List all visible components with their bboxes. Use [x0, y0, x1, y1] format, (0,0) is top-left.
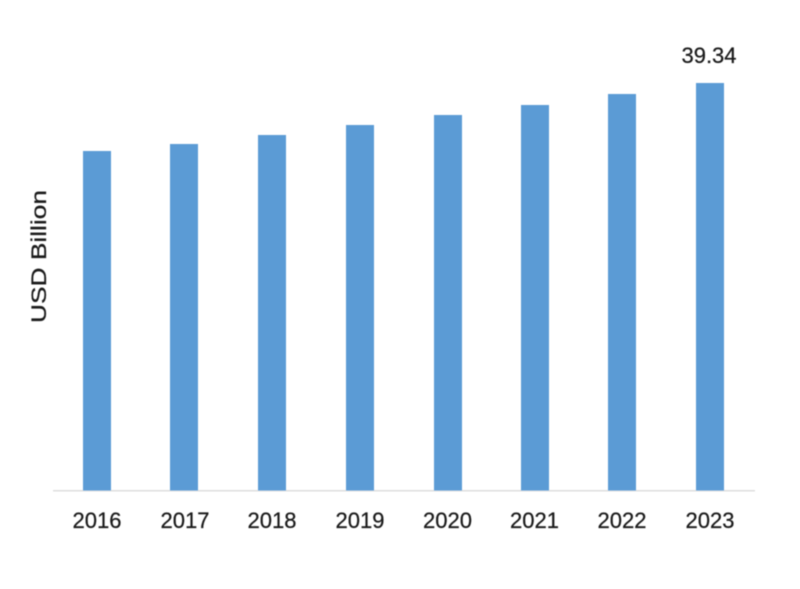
x axis year labels: 2023	[686, 508, 734, 533]
x axis year labels: 2021	[510, 508, 559, 533]
y axis title: USD Billion	[27, 190, 51, 323]
x axis year labels: 2017	[161, 508, 209, 533]
value label for 2023: 39.34	[681, 43, 737, 68]
x axis year labels: 2019	[336, 508, 384, 533]
x axis year labels: 2022	[598, 508, 646, 533]
x axis year labels: 2018	[248, 508, 296, 533]
x axis line	[53, 490, 755, 492]
x axis year labels: 2016	[73, 508, 121, 533]
x axis year labels	[73, 508, 734, 533]
bars	[83, 83, 724, 490]
x axis year labels: 2020	[423, 508, 472, 533]
